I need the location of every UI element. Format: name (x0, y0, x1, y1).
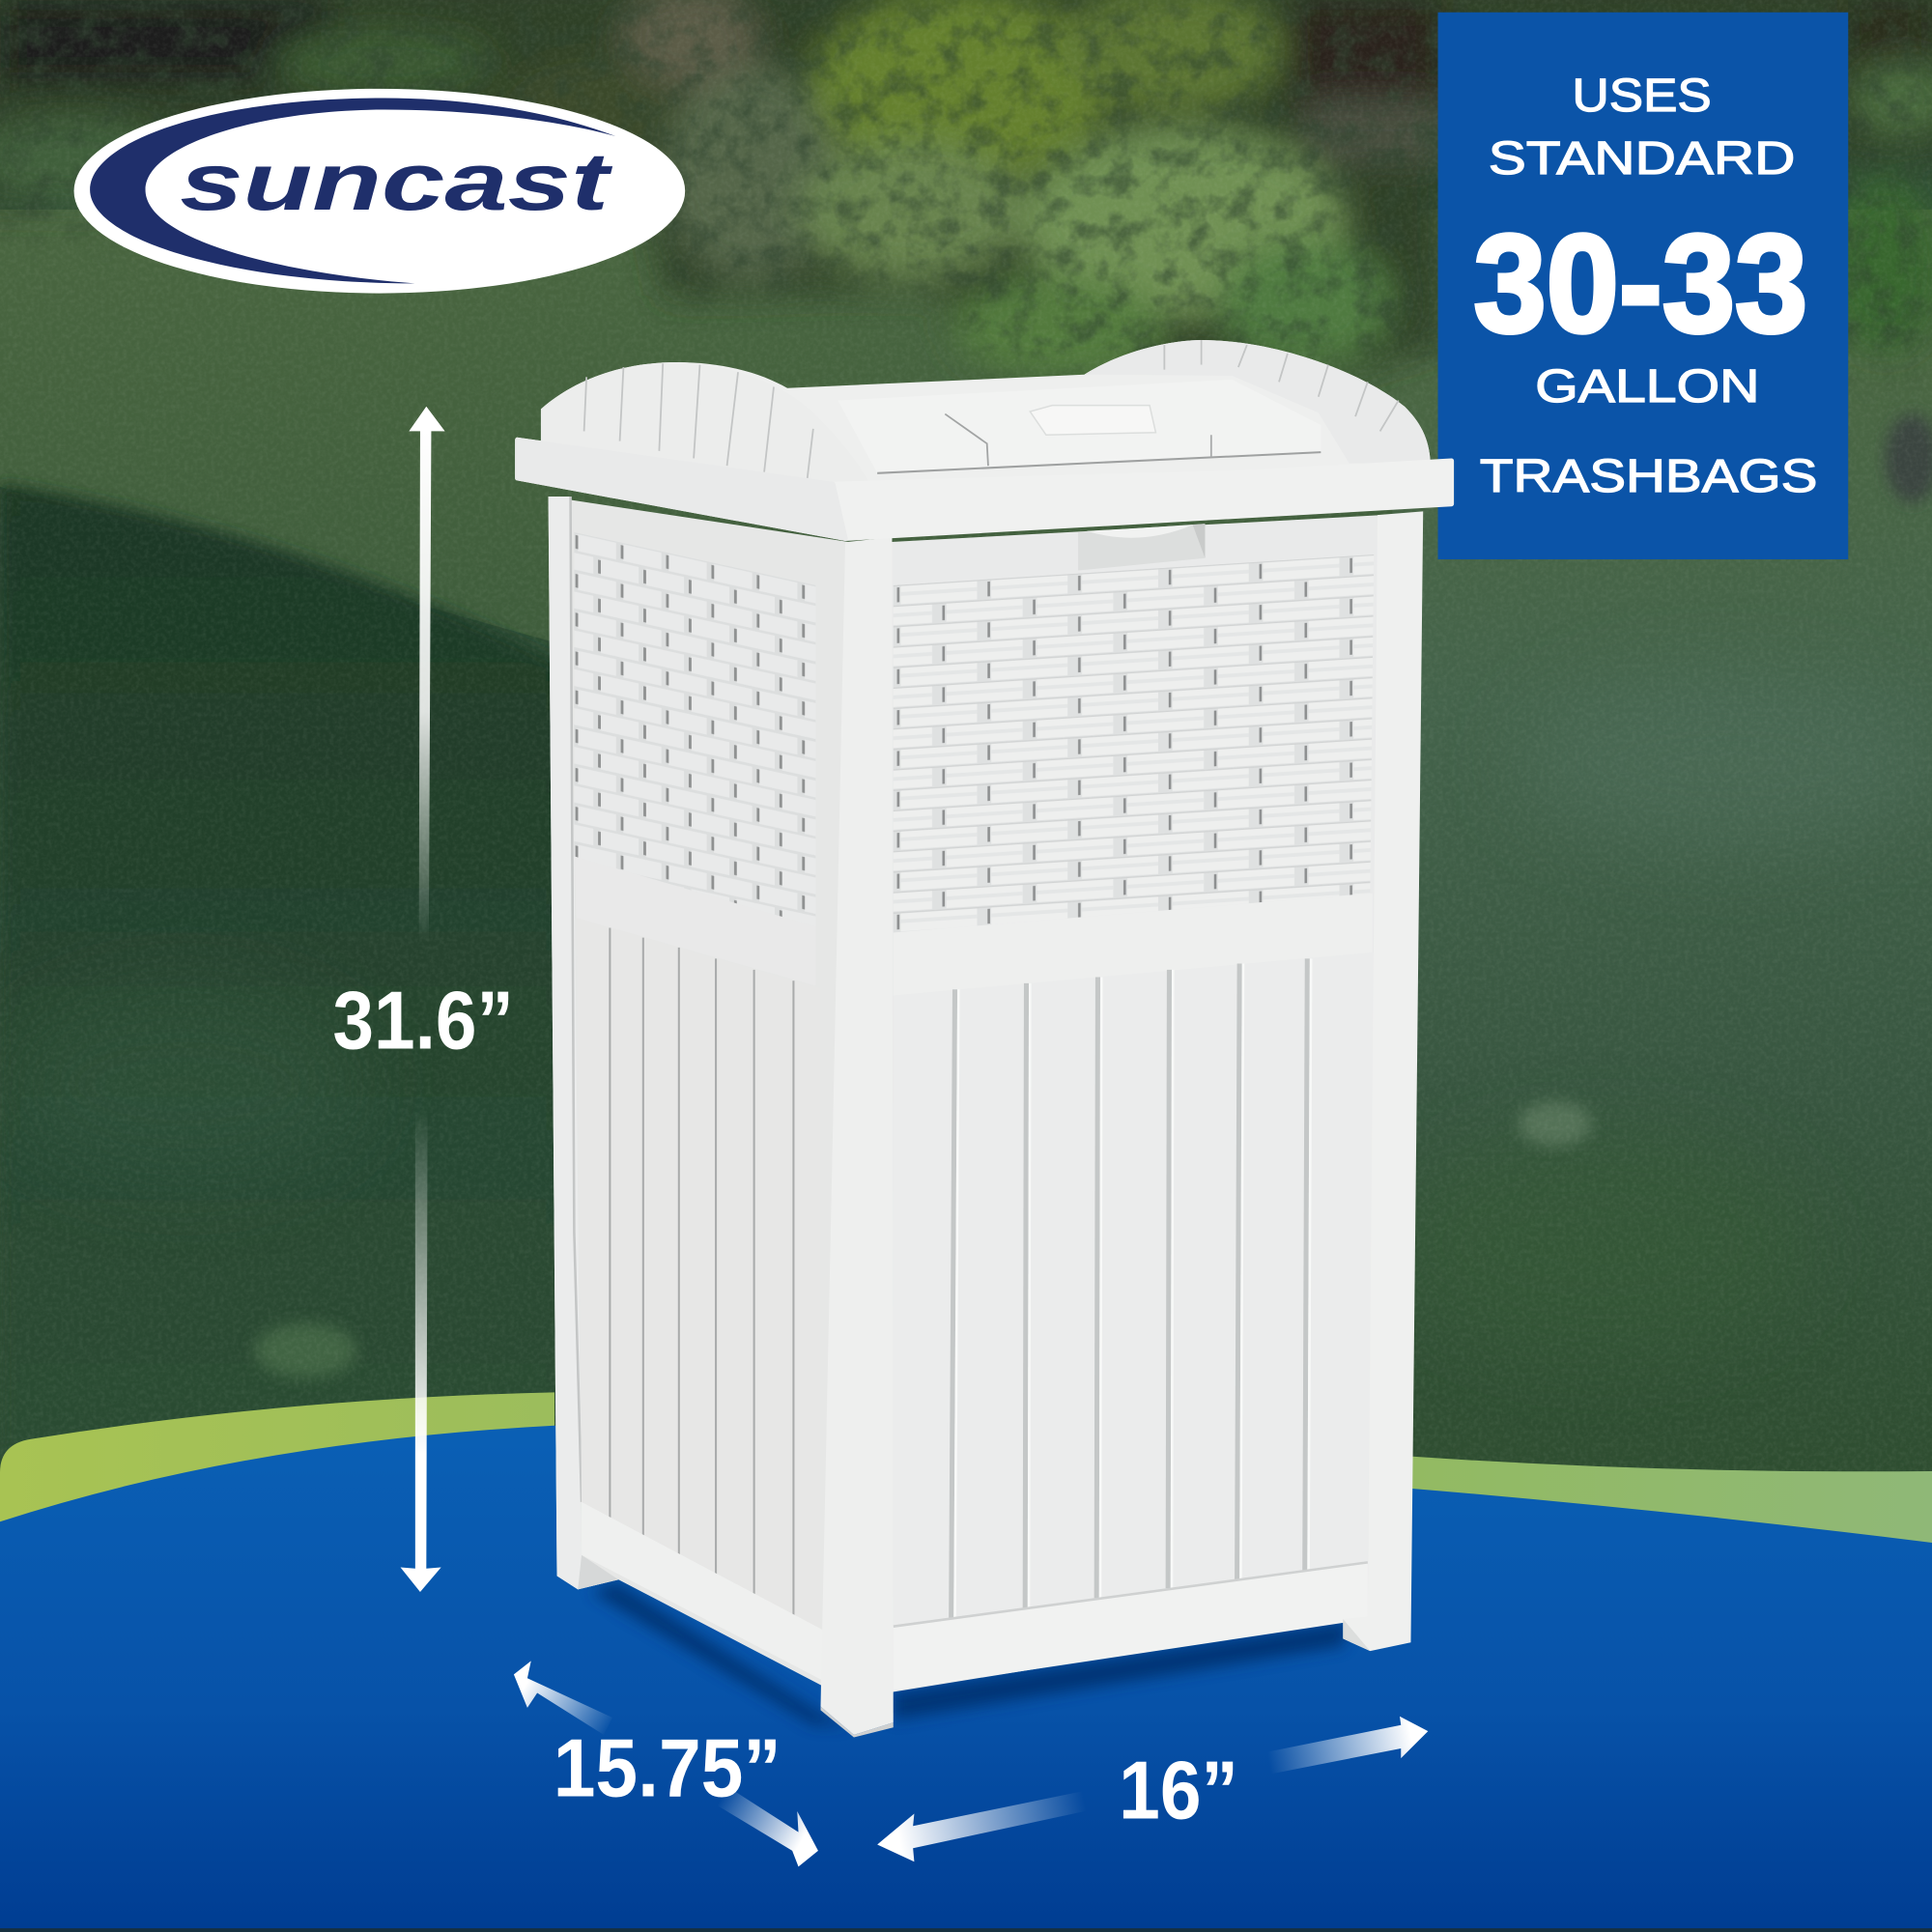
arrow down (401, 1109, 441, 1592)
logo swoosh (90, 99, 615, 283)
left slats (577, 918, 820, 1629)
handle recess (1078, 524, 1205, 571)
arrow up-left (514, 1661, 612, 1735)
lid right dome (1084, 340, 1431, 464)
callout line: gallon: GALLON (1535, 360, 1759, 412)
arrow right (1266, 1717, 1428, 1775)
lid silhouette (541, 340, 1431, 505)
callout figure: 30-33: 30-33 (1474, 206, 1807, 361)
depth dimension (514, 1661, 818, 1866)
garden photo background (0, 0, 1932, 1472)
left bottom rail (582, 1502, 826, 1682)
width dimension (877, 1717, 1428, 1861)
right post (1343, 511, 1423, 1651)
front slats (894, 952, 1374, 1627)
front corner post (820, 537, 894, 1735)
callout: trash bag size (1438, 13, 1848, 559)
lid handle (1030, 406, 1155, 435)
logo: suncast (74, 89, 685, 294)
lawn light patches (0, 678, 1932, 1355)
front mid rail (894, 894, 1373, 996)
depth label: 15.75” (554, 1723, 781, 1815)
front side face (887, 511, 1423, 1693)
arrow up (409, 407, 444, 943)
height dimension (332, 407, 514, 1592)
shaded lawn on left (0, 483, 567, 1454)
green ground wave, right (1410, 1457, 1932, 1548)
width label: 16” (1119, 1746, 1238, 1837)
green ground wave, left (0, 1392, 554, 1528)
height label: 31.6” (332, 975, 514, 1066)
front bottom rail (894, 1562, 1368, 1690)
lid door (838, 380, 1321, 473)
arrow down-right (715, 1788, 818, 1866)
left wicker panel (574, 532, 815, 926)
trash bin product (518, 340, 1452, 1737)
shadow under bin (591, 1582, 1350, 1725)
callout line: standard: STANDARD (1489, 132, 1795, 185)
callout line: uses: USES (1573, 70, 1712, 122)
upper lawn (0, 210, 1932, 640)
left post (549, 497, 618, 1589)
arrow left (877, 1790, 1091, 1861)
callout line: trashbags: TRASHBAGS (1480, 450, 1817, 502)
blue ground (0, 1426, 1932, 1932)
left mid rail (574, 856, 815, 985)
lid (518, 340, 1452, 538)
logo wordmark: suncast (180, 136, 612, 227)
lid left dome (541, 362, 871, 487)
garden foliage (0, 0, 1932, 376)
foreground leaves on lawn (254, 1101, 1592, 1378)
lawn on right (1392, 357, 1932, 1503)
left side face (549, 497, 850, 1700)
lid base band (518, 440, 1452, 538)
front wicker panel (894, 554, 1374, 933)
rock (1886, 414, 1932, 502)
